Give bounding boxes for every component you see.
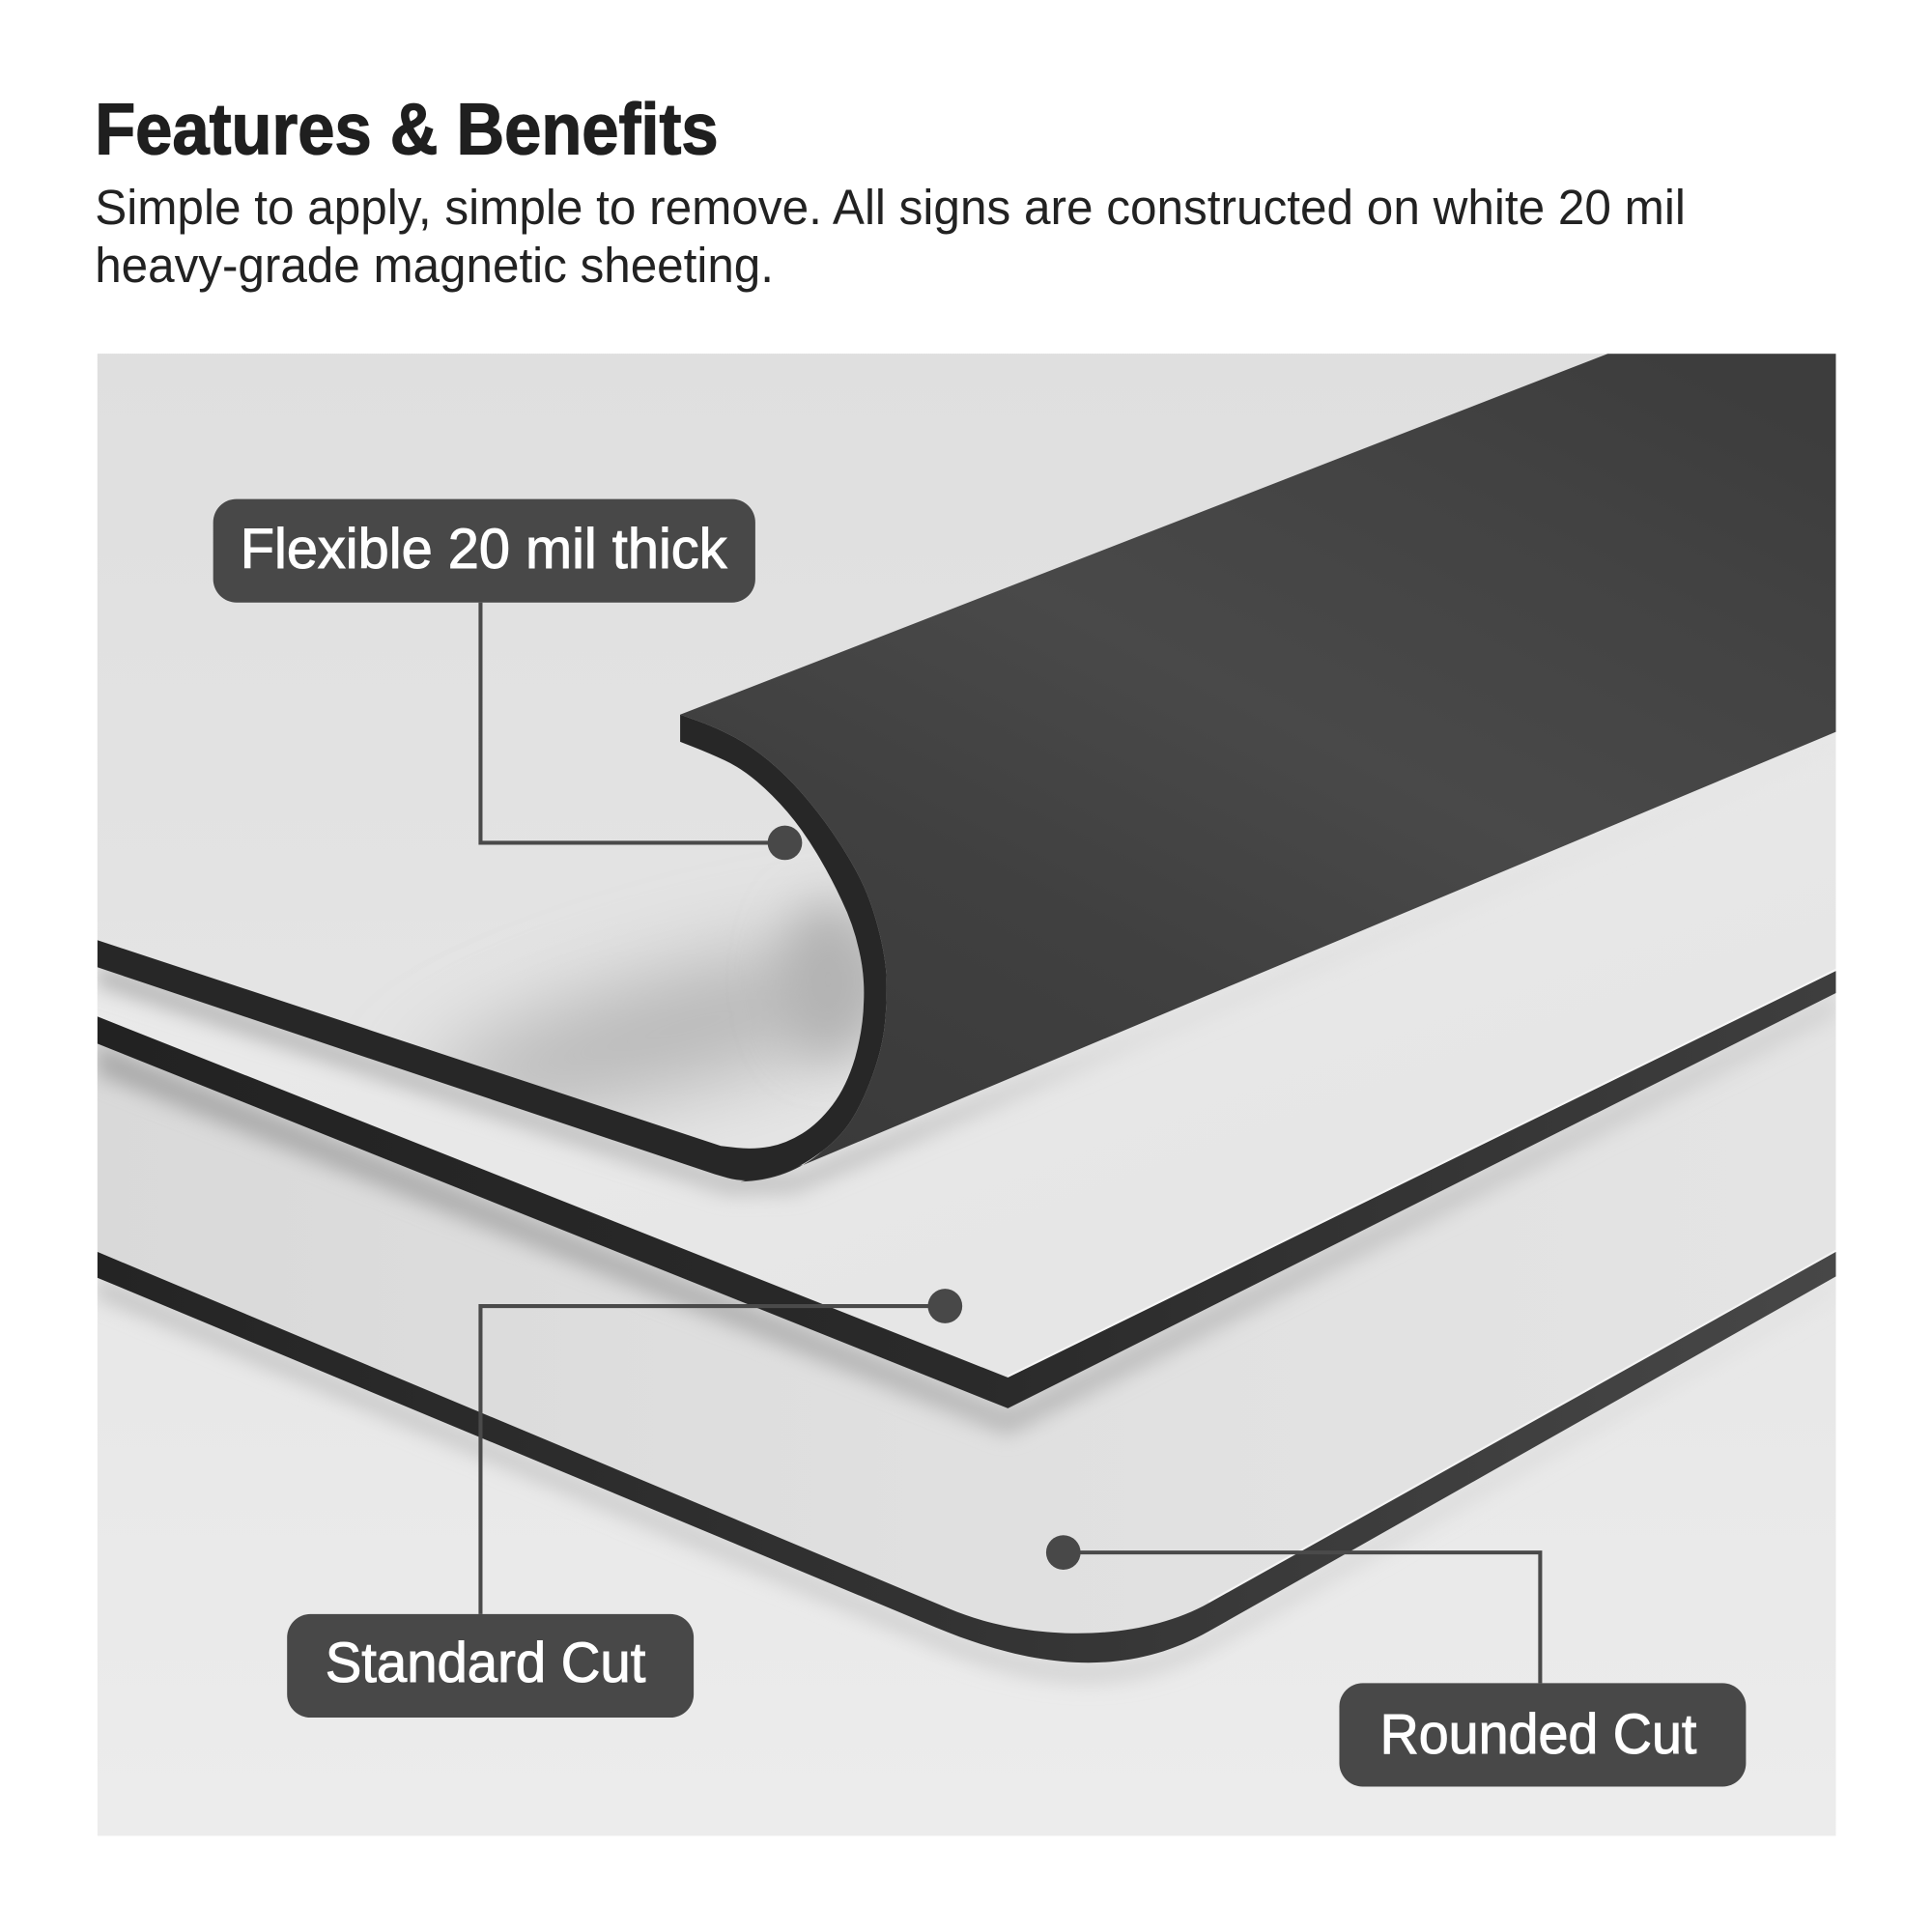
top sheet white surface xyxy=(98,354,1608,1149)
callout line and dot: flexible 20 mil xyxy=(480,603,802,860)
curl shadow on underside of sheet xyxy=(429,883,864,1126)
rolled sheet cut edge xyxy=(98,715,887,1180)
highlight on rounded cut sheet edge xyxy=(1208,1251,1836,1602)
rounded cut sheet edge xyxy=(98,1252,1836,1662)
callout label: Flexible 20 mil thick: Flexible 20 mil thick xyxy=(241,518,727,581)
callout label: Rounded Cut: Rounded Cut xyxy=(1380,1703,1696,1766)
subtitle text block: heavy-grade magnetic sheeting. xyxy=(95,238,774,293)
callout label: Rounded Cut xyxy=(1339,1683,1746,1786)
callout label: Flexible 20 mil thick xyxy=(213,499,755,603)
standard cut sheet edge xyxy=(98,971,1836,1408)
callout label: Standard Cut xyxy=(287,1614,694,1718)
rolled sheet black magnetic back xyxy=(680,354,1836,1181)
highlight on standard cut sheet edge xyxy=(1008,970,1836,1377)
standard cut sheet surface xyxy=(98,732,1836,1378)
panel: product photo of magnetic sheets xyxy=(98,354,1836,1836)
title: Features & Benefits xyxy=(95,88,719,169)
callout line and dot: standard cut xyxy=(480,1289,962,1614)
callout line and dot: rounded cut xyxy=(1046,1535,1540,1683)
subtitle text block: Simple to apply, simple to remove. All signs are constructed on white 20 mil xyxy=(95,180,1686,235)
callout label: Standard Cut: Standard Cut xyxy=(326,1632,645,1694)
subtitle text block xyxy=(95,180,1686,293)
rounded cut sheet surface xyxy=(98,1044,1302,1633)
